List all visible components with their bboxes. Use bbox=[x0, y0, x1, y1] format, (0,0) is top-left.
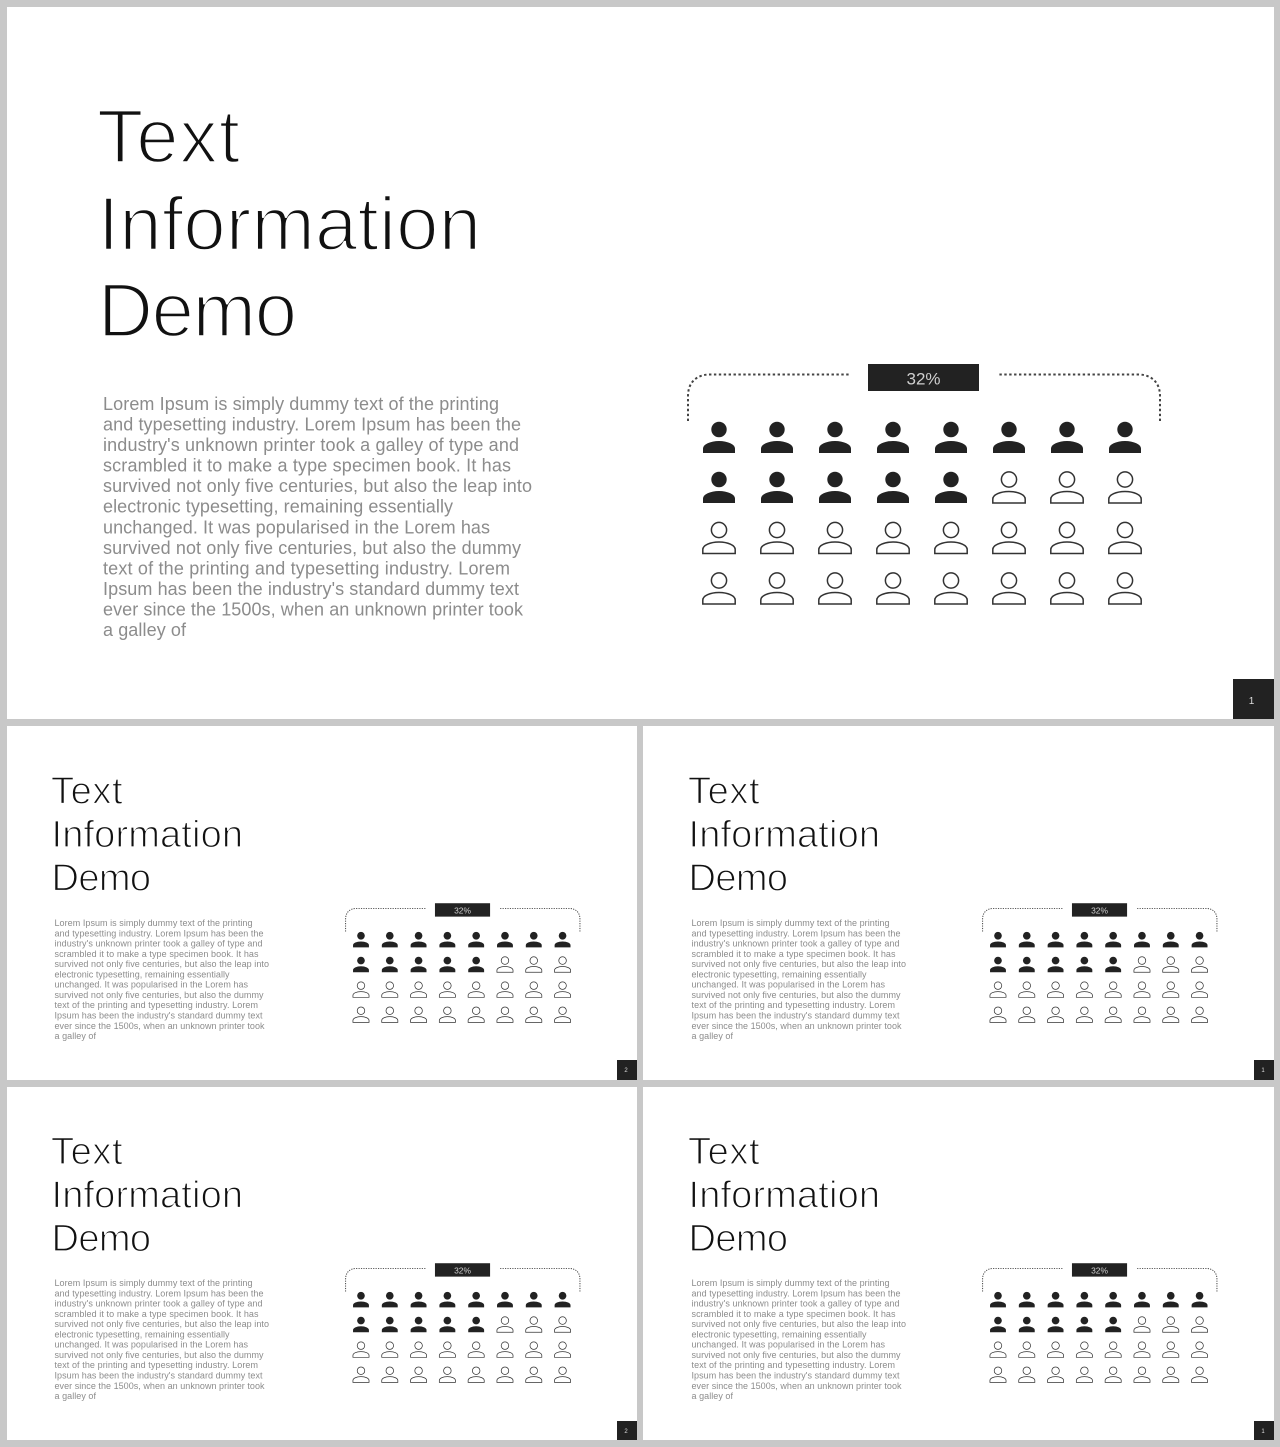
dotted bracket bbox=[983, 908, 1217, 932]
body text: survived not only five centuries, but also the dummy bbox=[103, 538, 521, 558]
body text: electronic typesetting, remaining essentially bbox=[692, 1329, 867, 1339]
body text: scrambled it to make a type specimen book. It has bbox=[692, 1309, 896, 1319]
body text: survived not only five centuries, but also the leap into bbox=[54, 1319, 269, 1329]
body text: text of the printing and typesetting industry. Lorem bbox=[103, 558, 510, 578]
body text: Lorem Ipsum is simply dummy text of the printing bbox=[692, 918, 890, 928]
body text: unchanged. It was popularised in the Lorem has bbox=[692, 1340, 886, 1350]
body text: a galley of bbox=[54, 1031, 96, 1041]
title: Demo bbox=[688, 857, 788, 899]
body text: Ipsum has been the industry's standard dummy text bbox=[103, 579, 519, 599]
percentage label: 32%: 32% bbox=[1091, 905, 1108, 915]
person icon grid: 13 of 32 filled bbox=[990, 932, 1208, 1022]
body text: electronic typesetting, remaining essentially bbox=[54, 1329, 230, 1339]
body text: survived not only five centuries, but also the leap into bbox=[692, 959, 906, 969]
body text: and typesetting industry. Lorem Ipsum has been the bbox=[103, 414, 521, 434]
title: Information bbox=[688, 1174, 880, 1216]
body text bbox=[54, 1278, 269, 1401]
page number badge bbox=[1254, 1421, 1274, 1440]
body text bbox=[54, 918, 269, 1041]
body text: ever since the 1500s, when an unknown printer took bbox=[692, 1381, 902, 1391]
body text: Ipsum has been the industry's standard dummy text bbox=[692, 1370, 900, 1380]
body text: electronic typesetting, remaining essentially bbox=[103, 497, 453, 517]
body text: survived not only five centuries, but also the leap into bbox=[103, 476, 532, 496]
page number badge: 1 bbox=[1261, 1429, 1265, 1435]
panel: small slide top left bbox=[7, 726, 637, 1080]
percentage label: 32% bbox=[435, 1263, 490, 1277]
panel: large slide bbox=[7, 7, 1274, 719]
body text: electronic typesetting, remaining essentially bbox=[54, 969, 230, 979]
percentage label: 32%: 32% bbox=[454, 1265, 471, 1275]
title: Demo bbox=[688, 1218, 788, 1260]
body text bbox=[692, 1278, 906, 1401]
body text: text of the printing and typesetting industry. Lorem bbox=[54, 1360, 258, 1370]
body text: survived not only five centuries, but also the leap into bbox=[54, 959, 269, 969]
body text: a galley of bbox=[692, 1031, 733, 1041]
body text: survived not only five centuries, but also the dummy bbox=[692, 990, 901, 1000]
person icon grid: 13 of 32 filled bbox=[990, 1292, 1208, 1382]
body text: survived not only five centuries, but also the dummy bbox=[54, 1350, 264, 1360]
body text: unchanged. It was popularised in the Lorem has bbox=[54, 1340, 248, 1350]
body text: a galley of bbox=[103, 620, 187, 640]
page number badge bbox=[1233, 679, 1274, 719]
body text: survived not only five centuries, but also the dummy bbox=[692, 1350, 901, 1360]
body text: and typesetting industry. Lorem Ipsum has been the bbox=[54, 928, 264, 938]
body text: electronic typesetting, remaining essentially bbox=[692, 969, 867, 979]
title bbox=[51, 1131, 243, 1260]
title: Text bbox=[51, 1131, 123, 1173]
title: Text bbox=[688, 1131, 760, 1173]
title: Text bbox=[51, 770, 123, 812]
body text: Ipsum has been the industry's standard dummy text bbox=[54, 1370, 263, 1380]
body text: industry's unknown printer took a galley of type and bbox=[692, 1298, 900, 1308]
panel: small slide top right bbox=[643, 726, 1274, 1080]
percentage label: 32%: 32% bbox=[454, 905, 471, 915]
body text bbox=[692, 918, 906, 1041]
page number badge: 1 bbox=[1261, 1068, 1265, 1074]
body text: scrambled it to make a type specimen book. It has bbox=[54, 1309, 259, 1319]
body text: Ipsum has been the industry's standard dummy text bbox=[692, 1010, 900, 1020]
body text: industry's unknown printer took a galley of type and bbox=[54, 938, 262, 948]
title: Information bbox=[52, 1174, 243, 1216]
body text: ever since the 1500s, when an unknown printer took bbox=[692, 1021, 902, 1031]
title: Text bbox=[97, 94, 240, 180]
person icon grid: 13 of 32 filled bbox=[353, 1292, 571, 1382]
title bbox=[688, 770, 880, 899]
title: Demo bbox=[98, 268, 297, 354]
page number badge: 1 bbox=[1249, 696, 1255, 707]
percentage label: 32% bbox=[1072, 903, 1127, 917]
page number badge: 2 bbox=[624, 1429, 628, 1435]
title: Demo bbox=[52, 857, 151, 899]
title bbox=[51, 770, 243, 899]
body text: survived not only five centuries, but also the dummy bbox=[54, 990, 264, 1000]
body text: Lorem Ipsum is simply dummy text of the printing bbox=[54, 918, 252, 928]
page number badge bbox=[617, 1060, 637, 1080]
page number badge bbox=[617, 1421, 637, 1440]
percentage label: 32% bbox=[1072, 1263, 1127, 1277]
body text: a galley of bbox=[692, 1391, 733, 1401]
body text: Lorem Ipsum is simply dummy text of the printing bbox=[54, 1278, 252, 1288]
title bbox=[688, 1131, 880, 1260]
person icon grid: 13 of 32 filled bbox=[353, 932, 571, 1022]
body text: industry's unknown printer took a galley of type and bbox=[692, 938, 900, 948]
dotted bracket bbox=[983, 1268, 1217, 1292]
person icon grid: 13 of 32 filled bbox=[703, 422, 1141, 604]
body text: Ipsum has been the industry's standard dummy text bbox=[54, 1010, 263, 1020]
body text: Lorem Ipsum is simply dummy text of the printing bbox=[692, 1278, 890, 1288]
title: Text bbox=[688, 770, 760, 812]
body text: unchanged. It was popularised in the Lorem has bbox=[54, 980, 248, 990]
title: Demo bbox=[52, 1218, 151, 1260]
body text: a galley of bbox=[54, 1391, 96, 1401]
body text: unchanged. It was popularised in the Lorem has bbox=[692, 980, 886, 990]
title: Information bbox=[52, 814, 243, 856]
body text: survived not only five centuries, but also the leap into bbox=[692, 1319, 906, 1329]
percentage label: 32%: 32% bbox=[1091, 1265, 1108, 1275]
body text: and typesetting industry. Lorem Ipsum has been the bbox=[692, 928, 900, 938]
dotted bracket bbox=[346, 908, 580, 932]
percentage label: 32%: 32% bbox=[906, 370, 941, 388]
body text bbox=[103, 394, 532, 640]
body text: Lorem Ipsum is simply dummy text of the printing bbox=[103, 394, 499, 414]
body text: scrambled it to make a type specimen book. It has bbox=[54, 949, 259, 959]
page number badge bbox=[1254, 1060, 1274, 1080]
dotted bracket bbox=[346, 1268, 580, 1292]
body text: and typesetting industry. Lorem Ipsum has been the bbox=[692, 1288, 900, 1298]
percentage label: 32% bbox=[868, 364, 979, 391]
title bbox=[97, 94, 481, 354]
body text: scrambled it to make a type specimen book. It has bbox=[692, 949, 896, 959]
body text: text of the printing and typesetting industry. Lorem bbox=[692, 1000, 895, 1010]
body text: text of the printing and typesetting industry. Lorem bbox=[54, 1000, 258, 1010]
body text: and typesetting industry. Lorem Ipsum has been the bbox=[54, 1288, 264, 1298]
body text: ever since the 1500s, when an unknown printer took bbox=[54, 1381, 265, 1391]
dotted bracket bbox=[688, 374, 1160, 421]
body text: ever since the 1500s, when an unknown printer took bbox=[54, 1021, 265, 1031]
percentage label: 32% bbox=[435, 903, 490, 917]
title: Information bbox=[98, 182, 481, 267]
title: Information bbox=[688, 814, 880, 856]
body text: scrambled it to make a type specimen book. It has bbox=[103, 456, 511, 476]
body text: industry's unknown printer took a galley of type and bbox=[54, 1298, 262, 1308]
body text: unchanged. It was popularised in the Lorem has bbox=[103, 517, 490, 537]
page number badge: 2 bbox=[624, 1068, 628, 1074]
body text: ever since the 1500s, when an unknown printer took bbox=[103, 600, 524, 620]
body text: text of the printing and typesetting industry. Lorem bbox=[692, 1360, 895, 1370]
panel: small slide bottom left bbox=[7, 1087, 637, 1440]
body text: industry's unknown printer took a galley of type and bbox=[103, 435, 519, 455]
panel: small slide bottom right bbox=[643, 1087, 1274, 1440]
